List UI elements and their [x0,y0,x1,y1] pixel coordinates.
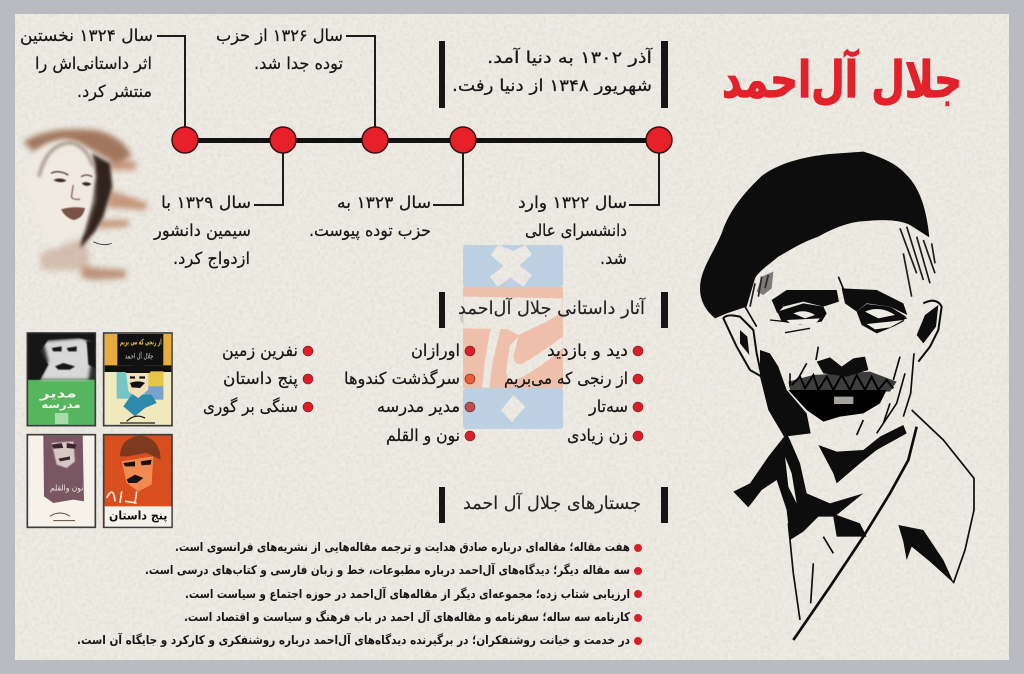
timeline text: 1329: سال ۱۳۲۹ با [161,193,251,212]
dark shadow [80,153,112,248]
timeline text: 1322 [518,193,627,268]
book cover: Panj Dastan [104,435,172,527]
shirt lines [788,523,833,620]
connector lines [157,36,659,205]
timeline text: 1323: حزب توده پیوست. [309,221,431,241]
timeline text: 1324 [20,26,153,102]
eyes, brows, nose and mouth [51,172,92,220]
birth and death box: آذر ۱۳۰۲ به دنیا آمد. [487,48,654,68]
timeline text: 1323: سال ۱۳۲۳ به [337,193,431,212]
eyes [777,303,906,333]
brown wash [23,129,148,280]
section heading: essays [439,487,668,523]
column one: زن زیادی [567,426,628,446]
axis [185,138,659,143]
jacket pocket shadow [898,525,954,583]
signature [93,242,112,245]
book cover: Az Ranji ke Mibarim: از رنجی که می بریم [120,338,162,347]
birth and death box: شهریور ۱۳۴۸ از دنیا رفت. [452,76,652,96]
beard [788,390,887,422]
book cover: Modir Madreseh [27,333,95,426]
column two: نون و القلم [386,426,460,446]
watermark logo [460,245,563,429]
hair hatching [750,227,935,307]
column one [504,341,628,446]
essay lines [77,540,630,648]
book cover: Noon val-Qalam [27,435,95,527]
list of essays [77,540,642,648]
beret [700,152,929,318]
birth and death box [439,41,668,108]
column two [344,341,460,446]
section heading: essays: جستارهای جلال آل احمد [463,492,641,514]
hair [39,143,93,177]
timeline text: 1322: شد. [600,249,627,268]
column two: سرگذشت کندوها [344,369,460,389]
timeline [157,36,672,205]
book cover: Modir Madreseh: مدرسه [41,400,81,411]
essay lines: هفت مقاله؛ مقاله‌ای درباره صادق هدایت و ترجمه مقاله‌هایی از نشریه‌های فرانسوی است. [175,540,630,555]
timeline text: 1324: اثر داستانی‌اش را [35,54,152,74]
timeline text: 1322: دانشسرای عالی [525,221,627,241]
book cover: Panj Dastan: پنج داستان [109,509,167,523]
moustache [788,372,897,392]
column three [203,341,298,417]
book cover: Noon val-Qalam: نون والقلم [50,484,83,493]
timeline text: 1323 [309,193,431,241]
scarf and face [23,139,94,250]
section heading: story works [439,292,668,328]
collar left and scarf [733,433,867,540]
essay lines: ارزیابی شتاب زده؛ مجموعه‌ای دیگر از مقاله‌های آل‌احمد در حوزه اجتماع و سیاست است. [185,586,630,602]
ears [723,301,942,377]
column one: از رنجی که می‌بریم [504,369,628,389]
year nodes [172,127,672,153]
essay lines: سه مقاله دیگر؛ دیدگاه‌های آل‌احمد درباره مطبوعات، خط و زبان فارسی و کتاب‌های درسی است. [145,562,630,578]
timeline text: 1329 [153,193,251,269]
list of story works [203,341,643,446]
list bullets [303,346,643,441]
timeline text: 1329: ازدواج کرد. [173,249,250,269]
jaw and neck shadow [818,425,907,483]
book cover: Az Ranji ke Mibarim [104,333,172,426]
column one: سه‌تار [588,397,628,417]
right cheek lines [857,353,914,435]
timeline text: 1324: سال ۱۳۲۴ نخستین [20,26,153,45]
portrait: Simin Daneshvar [23,129,148,280]
timeline text: 1322: سال ۱۳۲۲ وارد [518,193,627,213]
section heading: story works: آثار داستانی جلال آل‌احمد [458,297,646,319]
timeline text: 1324: منتشر کرد. [77,82,152,102]
portrait: Jalal Al-e Ahmad [700,152,974,640]
timeline text: 1326: توده جدا شد. [254,54,343,74]
timeline text: 1326 [216,26,343,74]
column two: مدیر مدرسه [377,397,460,417]
column two: اورازان [411,341,460,361]
column three: پنج داستان [223,369,298,389]
title: جلال آل‌احمد [722,49,962,109]
column three: سنگی بر گوری [203,397,298,417]
book cover: Az Ranji ke Mibarim: جلال آل احمد [125,351,153,361]
essay lines: در خدمت و خیانت روشنفکران؛ در برگیرنده دیدگاه‌های آل‌احمد درباره روشنفکری و کارکرد و جایگاه آن است. [77,632,630,648]
timeline text: 1329: سیمین دانشور [153,221,251,241]
column three: نفرین زمین [222,341,298,361]
essay lines: کارنامه سه ساله؛ سفرنامه و مقاله‌های آل احمد در باب فرهنگ و سیاست و اقتصاد است. [184,609,630,625]
face lines [745,277,847,360]
brows [772,288,907,315]
timeline text: 1326: سال ۱۳۲۶ از حزب [216,26,343,46]
essay bullets [634,544,642,645]
book cover: Modir Madreseh: مدیر [39,386,77,400]
column one: دید و بازدید [547,341,628,361]
jacket outline [912,410,974,583]
